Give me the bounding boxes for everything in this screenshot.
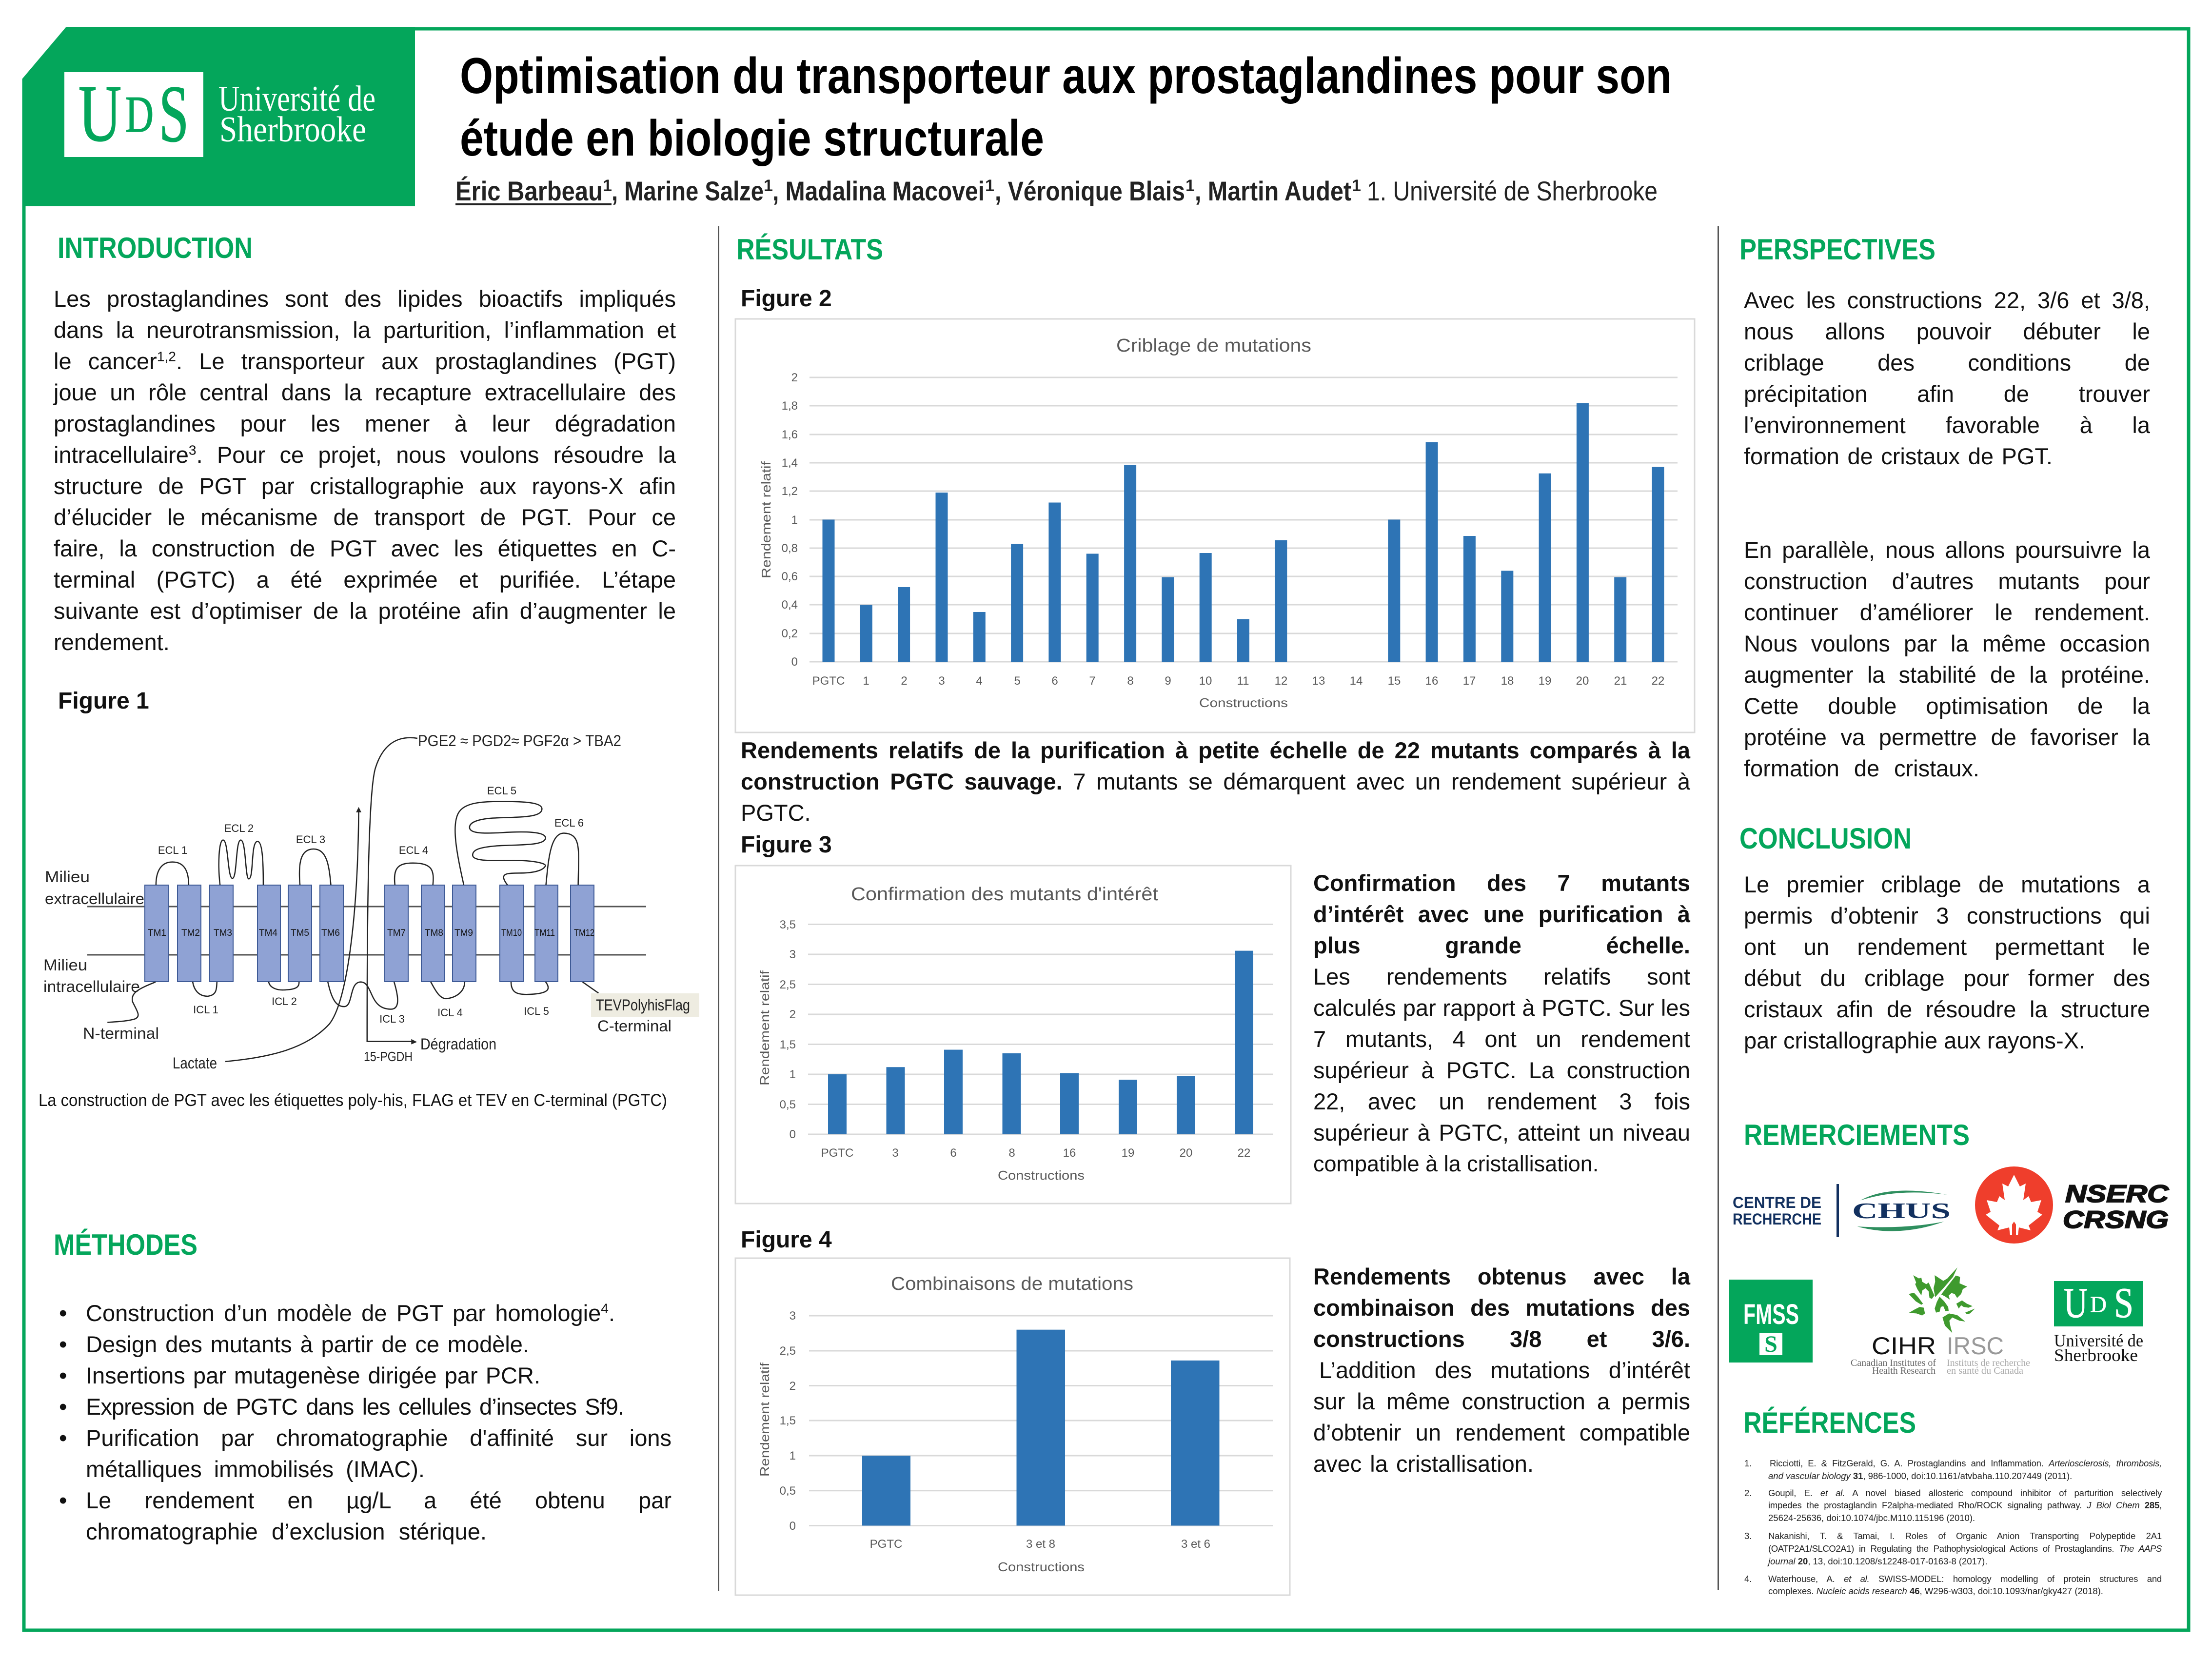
logo: Université de Sherbrooke small: S (2114, 1280, 2133, 1327)
logo: NSERC CRSNG: NSERC (2065, 1180, 2169, 1207)
y axis labels: 1,2 (782, 485, 798, 498)
x axis labels: 13 (1312, 674, 1325, 688)
gridlines (810, 377, 1678, 662)
x axis labels: 8 (1008, 1146, 1015, 1160)
text block: perspectives 2: Nous voulons par la même occasion (1744, 631, 2150, 656)
text block: introduction (53, 286, 676, 655)
tag highlight (591, 993, 699, 1017)
helix labels: TM2 (181, 928, 200, 938)
x axis labels: 9 (1165, 674, 1171, 688)
helix labels: TM8 (425, 928, 443, 938)
figure 1: PGT membrane topology diagram (39, 732, 699, 1110)
title: étude en biologie structurale (460, 110, 1044, 167)
logo: NSERC CRSNG (1975, 1166, 2169, 1244)
x axis labels: 12 (1275, 674, 1287, 688)
caption: figure 2: Rendements relatifs de la purification à petite échelle de 22 mutants comparés à la (741, 737, 1690, 763)
logo: centre de recherche CHUS: RECHERCHE (1733, 1210, 1821, 1228)
header logo block (22, 27, 415, 206)
y axis labels: 1,8 (782, 399, 798, 413)
logo: Université de Sherbrooke small: D (2090, 1292, 2107, 1318)
authors: , Marine Salze (612, 176, 764, 206)
label: figure 2: Figure 2 (741, 286, 832, 312)
text block: perspectives 1: formation de cristaux de PGT. (1744, 443, 2053, 469)
diagram labels: ICL 3 (379, 1013, 405, 1025)
label: figure 4: Figure 4 (741, 1227, 832, 1253)
helix labels: TM4 (259, 928, 277, 938)
logo: Université de Sherbrooke small: U (2064, 1280, 2088, 1327)
authors: 1 (985, 177, 994, 195)
logo: FMSS: FMSS (1743, 1299, 1799, 1330)
caption: figure 3: supérieur à PGTC. La construction (1313, 1057, 1690, 1083)
loops and termini (107, 738, 598, 1062)
y axis labels: 3 (790, 948, 796, 961)
x axis labels (812, 674, 1664, 688)
text block: perspectives 2: augmenter la stabilité de la protéine. (1744, 662, 2150, 688)
logo: CIHR IRSC: Canadian Institutes of (1851, 1358, 1936, 1368)
text block: conclusion (1744, 869, 2150, 1056)
authors: , Martin Audet (1195, 176, 1351, 206)
y axis labels: 0 (790, 1520, 796, 1533)
logo: CIHR IRSC: Health Research (1872, 1365, 1936, 1376)
text block: introduction: prostaglandines pour les mener à leur dégradation (54, 411, 676, 436)
authors: , Madalina Macovei (772, 176, 985, 206)
caption: figure 4: constructions 3/8 et 3/6. (1313, 1326, 1690, 1352)
authors: 1 (764, 177, 773, 195)
text block: references: 4. (1744, 1574, 1752, 1584)
y axis labels: 1,5 (780, 1414, 796, 1427)
caption: figure 3 (1313, 870, 1690, 1176)
text block: perspectives 1: Avec les constructions 22, 3/6 et 3/8, (1744, 287, 2150, 313)
y axis labels: 0,6 (782, 570, 798, 583)
diagram labels: Milieu (43, 956, 87, 974)
text block: méthodes: Insertions par mutagenèse dirigée par PCR. (86, 1363, 540, 1388)
text block: perspectives 2: Cette double optimisation de la (1744, 693, 2150, 719)
logo: centre de recherche CHUS: CHUS (1852, 1199, 1951, 1223)
diagram labels: ICL 4 (437, 1007, 463, 1019)
header logo block: S (159, 69, 189, 158)
text block: méthodes: métalliques immobilisés (IMAC). (86, 1456, 425, 1482)
caption: figure 3: supérieur à PGTC, atteint un niveau (1313, 1120, 1690, 1146)
x axis labels: 18 (1501, 674, 1514, 688)
x axis labels: 7 (1089, 674, 1096, 688)
x axis labels: 15 (1388, 674, 1401, 688)
text block: méthodes: Le rendement en µg/L a été obtenu par (86, 1487, 672, 1513)
authors: 1 (1185, 177, 1195, 195)
x axis labels: 5 (1014, 674, 1021, 688)
authors: 1 (1352, 177, 1361, 195)
caption: figure 3: d’intérêt avec une purification à (1313, 901, 1690, 927)
caption: figure 3: plus grande échelle. (1313, 932, 1690, 958)
y axis labels: 0,4 (782, 598, 798, 612)
reference list: journal 20, 13, doi:10.1208/s12248-017-0163-8 (2017). (1768, 1556, 1988, 1566)
caption: figure 4: L’addition des mutations d’intérêt (1319, 1357, 1690, 1383)
header logo block: D (125, 86, 154, 143)
text block: perspectives 1: nous allons pouvoir débuter le (1744, 318, 2150, 344)
label: figure 1: Figure 1 (58, 688, 149, 714)
heading: conclusion: CONCLUSION (1739, 822, 1912, 855)
diagram labels: Milieu (45, 868, 90, 886)
helix labels: TM6 (321, 928, 340, 938)
authors: , Véronique Blais (995, 176, 1185, 206)
helix labels: TM12 (574, 928, 594, 938)
diagram labels: ICL 2 (272, 995, 297, 1007)
x axis labels: 22 (1238, 1146, 1250, 1160)
logo: Université de Sherbrooke small: Université de (2054, 1331, 2143, 1350)
heading: résultats: RÉSULTATS (736, 233, 883, 266)
text block: conclusion: ont un rendement permettant le (1744, 934, 2150, 960)
y axis labels: 2 (790, 1008, 796, 1021)
reference list: impedes the prostaglandin F2alpha-mediated Rho/ROCK signaling pathway. J Biol Chem 285, (1768, 1500, 2162, 1510)
helix labels: TM1 (148, 928, 166, 938)
y axis labels: 0,2 (782, 627, 798, 640)
y axis labels (782, 371, 798, 669)
caption: figure 3: Confirmation des 7 mutants (1313, 870, 1690, 896)
caption: figure 3: compatible à la cristallisation. (1313, 1151, 1599, 1176)
figure 1 caption: La construction de PGT avec les étiquettes poly-his, FLAG et TEV en C-terminal (PGTC) (39, 1091, 667, 1110)
diagram labels: Dégradation (420, 1035, 496, 1053)
text block: references: 1. (1744, 1458, 1752, 1468)
y axis labels: 0,8 (782, 542, 798, 555)
y axis labels: 2 (790, 1380, 796, 1393)
caption: figure 4: avec la cristallisation. (1313, 1451, 1534, 1477)
diagram labels: ECL 2 (224, 822, 254, 834)
caption: figure 4: combinaison des mutations des (1313, 1295, 1690, 1321)
y axis labels: 2 (791, 371, 798, 384)
y axis labels: 0,5 (780, 1098, 796, 1111)
diagram labels: intracellulaire (43, 978, 140, 995)
chart title: Combinaisons de mutations (891, 1274, 1133, 1294)
text block: méthodes: chromatographie d’exclusion stérique. (86, 1519, 487, 1544)
x axis labels: 4 (976, 674, 983, 688)
logo: CIHR IRSC: en santé du Canada (1947, 1365, 2023, 1376)
text: • (59, 1425, 67, 1451)
authors: 1. Université de Sherbrooke (1367, 176, 1658, 206)
y axis labels (780, 1309, 796, 1533)
caption: figure 3: 22, avec un rendement 3 fois (1313, 1088, 1690, 1114)
helix labels: TM5 (291, 928, 309, 938)
x axis labels: 8 (1127, 674, 1134, 688)
x axis labels: 6 (1051, 674, 1058, 688)
x axis labels: 20 (1576, 674, 1589, 688)
x axis labels: PGTC (870, 1538, 902, 1551)
chart title: Criblage de mutations (1116, 336, 1311, 356)
x axis labels: 14 (1350, 674, 1363, 688)
logo: Université de Sherbrooke small: Sherbrooke (2054, 1345, 2138, 1365)
text block: introduction: rendement. (54, 629, 170, 655)
logo: CIHR IRSC: IRSC (1947, 1332, 2004, 1360)
y axis labels: 1 (790, 1068, 796, 1081)
axis titles: Constructions (1199, 695, 1288, 710)
header logo block: Sherbrooke (219, 110, 366, 150)
helix labels: TM11 (534, 928, 555, 938)
membrane lines (87, 907, 646, 955)
header logo block: Université de (218, 79, 375, 119)
authors (455, 176, 1658, 206)
y axis labels: 1,4 (782, 456, 798, 470)
diagram labels: ICL 5 (524, 1005, 549, 1017)
text block: introduction: faire, la construction de PGT avec les étiquettes en C- (54, 535, 676, 561)
y axis labels: 1,5 (780, 1038, 796, 1051)
y axis labels: 2,5 (780, 978, 796, 991)
text block: references: 2. (1744, 1488, 1752, 1498)
label: figure 3: Figure 3 (741, 832, 832, 858)
figure 2: bar chart, criblage de mutations (735, 319, 1695, 732)
diagram labels: ECL 4 (399, 844, 428, 856)
text: • (59, 1363, 67, 1388)
text: • (59, 1300, 67, 1326)
reference list: Ricciotti, E. & FitzGerald, G. A. Prostaglandins and Inflammation. Arteriosclerosis, thrombosis, (1770, 1458, 2162, 1468)
diagram labels: ICL 1 (193, 1004, 218, 1016)
axis titles: Rendement relatif (759, 461, 773, 578)
title: Optimisation du transporteur aux prostaglandines pour son (460, 48, 1672, 104)
text block: introduction: structure de PGT par cristallographie aux rayons-X afin (54, 473, 676, 499)
x axis labels: 3 (892, 1146, 899, 1160)
diagram labels (43, 732, 690, 1072)
text: • (59, 1394, 66, 1420)
text block: introduction: intracellulaire3. Pour ce projet, nous voulons résoudre la (54, 442, 676, 468)
maple leaf pieces (1909, 1267, 1975, 1333)
x axis labels (870, 1538, 1210, 1551)
diagram labels: C-terminal (597, 1017, 672, 1035)
caption: figure 3: Les rendements relatifs sont (1313, 964, 1690, 989)
axis titles (759, 461, 1288, 710)
reference list: (OATP2A1/SLCO2A1) in Regulating the Pathophysiological Actions of Prostaglandins. The AAPS (1768, 1543, 2162, 1554)
text: • (59, 1331, 67, 1357)
x axis labels: 21 (1614, 674, 1627, 688)
x axis labels: 17 (1463, 674, 1476, 688)
diagram labels: N-terminal (83, 1025, 159, 1042)
text block: perspectives 2: continuer d’améliorer le rendement. (1744, 599, 2150, 625)
x axis labels: 11 (1237, 674, 1249, 688)
text block: conclusion: Le premier criblage de mutations a (1744, 871, 2150, 897)
heading: introduction: INTRODUCTION (58, 232, 253, 264)
logo: CIHR IRSC: CIHR (1872, 1332, 1936, 1360)
text block: perspectives 2: construction d’autres mutants pour (1744, 568, 2150, 594)
reference list: complexes. Nucleic acids research 46, W296-w303, doi:10.1093/nar/gky427 (2018). (1768, 1586, 2103, 1596)
logo: centre de recherche CHUS (1733, 1184, 1951, 1237)
x axis labels: PGTC (821, 1146, 853, 1160)
text block: perspectives 2: En parallèle, nous allons poursuivre la (1744, 537, 2150, 563)
text block: conclusion: cristaux afin de résoudre la structure (1744, 996, 2150, 1022)
text block: introduction: le cancer1,2. Le transporteur aux prostaglandines (PGT) (54, 348, 676, 374)
bars (822, 403, 1664, 662)
heading: références: RÉFÉRENCES (1743, 1406, 1916, 1439)
diagram labels: ECL 3 (296, 833, 325, 846)
diagram labels: Lactate (173, 1054, 217, 1072)
gridlines (808, 925, 1273, 1134)
text block: perspectives 1: précipitation afin de trouver (1744, 381, 2150, 407)
bars (862, 1330, 1219, 1525)
x axis labels: 22 (1652, 674, 1664, 688)
text block: conclusion: permis d’obtenir 3 constructions qui (1744, 903, 2150, 928)
caption: figure 2: construction PGTC sauvage. 7 mutants se démarquent avec un rendement supérieur à (741, 769, 1690, 794)
caption: figure 2 (741, 737, 1690, 826)
title (460, 48, 1672, 167)
diagram labels: extracellulaire (45, 890, 144, 908)
reference list: Nakanishi, T. & Tamai, I. Roles of Organic Anion Transporting Polypeptide 2A1 (1768, 1531, 2162, 1541)
caption: figure 4: Rendements obtenus avec la (1313, 1264, 1690, 1289)
axis titles: Rendement relatif (757, 970, 772, 1086)
text block: méthodes (59, 1300, 672, 1544)
authors: 1 (603, 177, 612, 195)
caption: figure 2: PGTC. (741, 800, 811, 826)
heading: méthodes: MÉTHODES (54, 1228, 198, 1261)
y axis labels: 0 (790, 1128, 796, 1141)
axis titles: Constructions (998, 1168, 1085, 1183)
diagram labels: 15-PGDH (364, 1049, 413, 1064)
text block: introduction: suivante est d’optimiser de la protéine afin d’augmenter le (54, 598, 676, 624)
y axis labels (780, 918, 796, 1141)
logo: CIHR IRSC: Instituts de recherche (1947, 1358, 2030, 1368)
helix labels: TM3 (214, 928, 232, 938)
reference list: 25624-25636, doi:10.1074/jbc.M110.115196 (2010). (1768, 1513, 1975, 1523)
caption: figure 4 (1313, 1264, 1690, 1477)
text block: introduction: Les prostaglandines sont des lipides bioactifs impliqués (54, 286, 676, 312)
axis titles: Rendement relatif (757, 1362, 772, 1477)
caption: figure 3: 7 mutants, 4 ont un rendement (1313, 1026, 1690, 1052)
text: • (59, 1487, 67, 1513)
x axis labels: 19 (1539, 674, 1551, 688)
y axis labels: 0 (791, 655, 798, 669)
y axis labels: 0,5 (780, 1484, 796, 1498)
text block: introduction: dans la neurotransmission, la parturition, l’inflammation et (54, 317, 676, 343)
helix labels (148, 928, 594, 938)
text block: conclusion: par cristallographie aux rayons-X. (1744, 1027, 2085, 1053)
logo: Université de Sherbrooke small (2054, 1280, 2143, 1365)
helix labels: TM10 (501, 928, 522, 938)
x axis labels: 16 (1425, 674, 1438, 688)
text block: introduction: joue un rôle central dans la recapture extracellulaire des (54, 379, 676, 405)
text block: references (1744, 1457, 2162, 1600)
x axis labels: 2 (901, 674, 908, 688)
authors: Éric Barbeau (455, 176, 603, 206)
transmembrane helices (145, 885, 594, 982)
gridlines (809, 1316, 1273, 1525)
axis titles (757, 970, 1085, 1183)
caption: figure 3: calculés par rapport à PGTC. Sur les (1313, 995, 1690, 1021)
reference list: and vascular biology 31, 986-1000, doi:10.1161/atvbaha.110.207449 (2011). (1768, 1471, 2072, 1481)
x axis labels: 1 (863, 674, 869, 688)
helix labels: TM9 (454, 928, 473, 938)
heading: remerciements: REMERCIEMENTS (1744, 1119, 1970, 1151)
x axis labels: 3 et 8 (1026, 1538, 1055, 1551)
column dividers (718, 226, 1719, 1591)
text block: references: 3. (1744, 1531, 1752, 1541)
y axis labels: 1,6 (782, 428, 798, 441)
reference list (1768, 1457, 2162, 1600)
text block: méthodes: Construction d’un modèle de PGT par homologie4. (86, 1300, 615, 1326)
text block: méthodes: Purification par chromatographie d'affinité sur ions (86, 1425, 672, 1451)
text block: perspectives 2: protéine va permettre de favoriser la (1744, 724, 2150, 750)
reference list: Waterhouse, A. et al. SWISS-MODEL: homology modelling of protein structures and (1768, 1574, 2162, 1584)
x axis labels: 6 (950, 1146, 957, 1160)
logo: FMSS (1729, 1280, 1813, 1363)
x axis labels: 19 (1122, 1146, 1134, 1160)
x axis labels: 3 (938, 674, 945, 688)
x axis labels (821, 1146, 1250, 1160)
y axis labels: 1 (790, 1449, 796, 1462)
text block: perspectives 1 (1744, 287, 2150, 469)
diagram labels: ECL 1 (158, 844, 187, 856)
text block: perspectives 2 (1744, 537, 2150, 781)
text block: introduction: terminal (PGTC) a été exprimée et purifiée. L’étape (54, 567, 676, 592)
logo: centre de recherche CHUS: CENTRE DE (1733, 1194, 1821, 1211)
diagram labels: ECL 5 (487, 785, 516, 797)
diagram labels: ECL 6 (554, 817, 584, 829)
chart title: Confirmation des mutants d'intérêt (851, 884, 1158, 905)
text block: introduction: d’élucider le mécanisme de transport de PGT. Pour ce (54, 504, 676, 530)
logo: CIHR IRSC (1851, 1267, 2030, 1376)
caption: figure 4: sur la même construction a permis (1313, 1388, 1690, 1414)
x axis labels: 3 et 6 (1181, 1538, 1210, 1551)
x axis labels: 16 (1063, 1146, 1076, 1160)
bars (828, 951, 1253, 1134)
helix labels: TM7 (387, 928, 406, 938)
y axis labels: 2,5 (780, 1344, 796, 1358)
text block: conclusion: début du criblage pour former des (1744, 965, 2150, 991)
axis titles (757, 1362, 1085, 1574)
x axis labels: 20 (1180, 1146, 1192, 1160)
x axis labels: 10 (1199, 674, 1212, 688)
logo: FMSS: S (1764, 1331, 1778, 1357)
header logo block: U (79, 68, 121, 158)
text block: perspectives 1: l’environnement favorable à la (1744, 412, 2150, 438)
text block: méthodes: Design des mutants à partir de ce modèle. (86, 1331, 529, 1357)
logo: NSERC CRSNG: CRSNG (2063, 1206, 2169, 1233)
figure 4: bar chart, combinaisons de mutations (735, 1258, 1290, 1595)
heading: perspectives: PERSPECTIVES (1739, 233, 1936, 266)
axis titles: Constructions (998, 1560, 1085, 1574)
y axis labels: 3,5 (780, 918, 796, 931)
diagram labels: PGE2 ≈ PGD2≈ PGF2α > TBA2 (418, 732, 621, 750)
x axis labels: PGTC (812, 674, 845, 688)
caption: figure 4: d’obtenir un rendement compatible (1313, 1420, 1690, 1445)
y axis labels: 1 (791, 514, 798, 527)
figure 3: bar chart, confirmation des mutants (735, 866, 1291, 1204)
diagram labels: TEVPolyhisFlag (596, 996, 690, 1014)
text block: méthodes: Expression de PGTC dans les cellules d’insectes Sf9. (86, 1394, 624, 1420)
reference list: Goupil, E. et al. A novel biased allosteric compound inhibitor of parturition selectively (1768, 1488, 2162, 1498)
y axis labels: 3 (790, 1309, 796, 1323)
text block: perspectives 1: criblage des conditions de (1744, 350, 2150, 375)
text block: perspectives 2: formation de cristaux. (1744, 755, 1979, 781)
